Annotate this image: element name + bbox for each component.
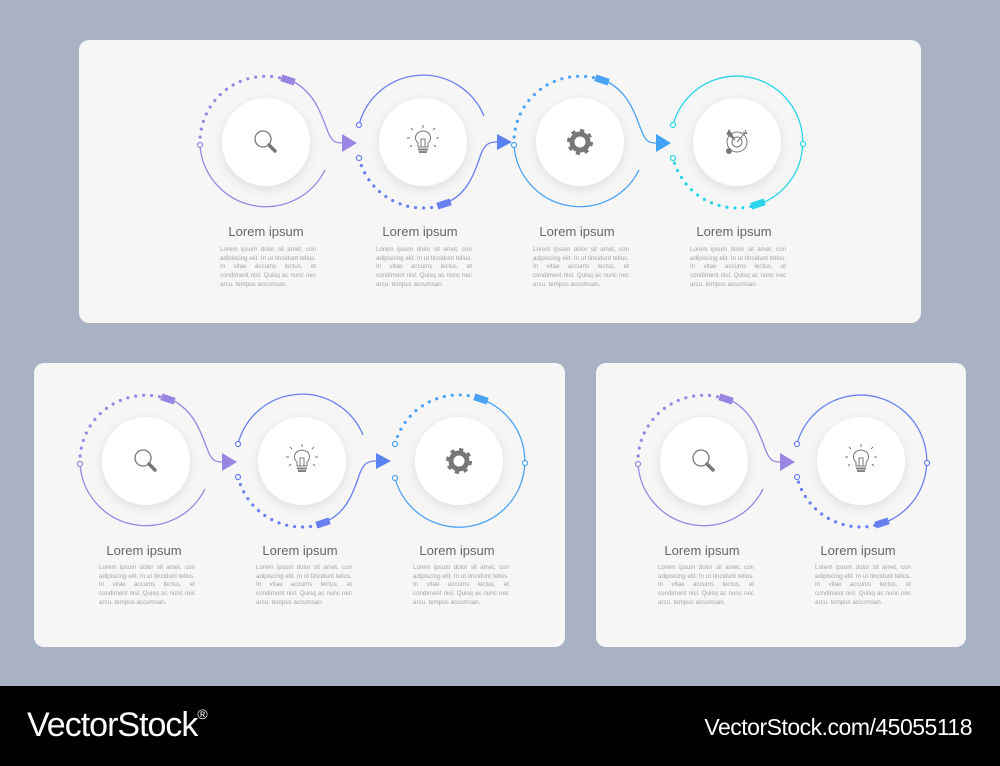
bottom-right step 2 bbox=[794, 395, 930, 528]
bottom-left step 3 bbox=[392, 394, 528, 527]
bottom-right texts: Lorem ipsum bbox=[664, 543, 740, 558]
text: Lorem ipsum dolor sit amet, con adipiscing elit. In ut tincidunt tellus. In vitae accums lectus, et condiment nisl. Quisq ac nunc nec arcu. tempus accumsan. bbox=[413, 564, 509, 606]
bottom-left step 2 bbox=[236, 394, 391, 528]
top step 1 bbox=[198, 75, 357, 207]
panel: bottom-left bbox=[34, 363, 565, 647]
panel: bottom-right bbox=[596, 363, 966, 647]
text: Lorem ipsum dolor sit amet, con adipiscing elit. In ut tincidunt tellus. In vitae accums lectus, et condiment nisl. Quisq ac nunc nec arcu. tempus accumsan. bbox=[815, 564, 911, 606]
top texts: Lorem ipsum bbox=[228, 224, 304, 239]
bottom-right step 1 bbox=[636, 394, 795, 526]
text: Lorem ipsum bbox=[820, 543, 896, 558]
footer bar bbox=[0, 686, 1000, 766]
footer logo: VectorStock® bbox=[27, 706, 207, 744]
text: Lorem ipsum dolor sit amet, con adipiscing elit. In ut tincidunt tellus. In vitae accums lectus, et condiment nisl. Quisq ac nunc nec arcu. tempus accumsan. bbox=[658, 564, 754, 606]
top step 4 bbox=[670, 76, 806, 209]
top step 3 bbox=[512, 75, 671, 207]
text: Lorem ipsum bbox=[539, 224, 615, 239]
bottom-left step 1 bbox=[78, 394, 237, 526]
text: Lorem ipsum dolor sit amet, con adipiscing elit. In ut tincidunt tellus. In vitae accums lectus, et condiment nisl. Quisq ac nunc nec arcu. tempus accumsan. bbox=[99, 564, 195, 606]
text: Lorem ipsum bbox=[382, 224, 458, 239]
text: Lorem ipsum dolor sit amet, con adipiscing elit. In ut tincidunt tellus. In vitae accums lectus, et condiment nisl. Quisq ac nunc nec arcu. tempus accumsan. bbox=[220, 246, 316, 288]
text: Lorem ipsum bbox=[262, 543, 338, 558]
panel: top bbox=[79, 40, 921, 323]
top step 2 bbox=[356, 75, 512, 209]
footer url: VectorStock.com/45055118 bbox=[704, 714, 972, 740]
bottom-left texts: Lorem ipsum bbox=[106, 543, 182, 558]
text: Lorem ipsum dolor sit amet, con adipiscing elit. In ut tincidunt tellus. In vitae accums lectus, et condiment nisl. Quisq ac nunc nec arcu. tempus accumsan. bbox=[690, 246, 786, 288]
text: Lorem ipsum dolor sit amet, con adipiscing elit. In ut tincidunt tellus. In vitae accums lectus, et condiment nisl. Quisq ac nunc nec arcu. tempus accumsan. bbox=[376, 246, 472, 288]
text: Lorem ipsum bbox=[696, 224, 772, 239]
text: Lorem ipsum dolor sit amet, con adipiscing elit. In ut tincidunt tellus. In vitae accums lectus, et condiment nisl. Quisq ac nunc nec arcu. tempus accumsan. bbox=[256, 564, 352, 606]
text: Lorem ipsum bbox=[419, 543, 495, 558]
text: Lorem ipsum dolor sit amet, con adipiscing elit. In ut tincidunt tellus. In vitae accums lectus, et condiment nisl. Quisq ac nunc nec arcu. tempus accumsan. bbox=[533, 246, 629, 288]
